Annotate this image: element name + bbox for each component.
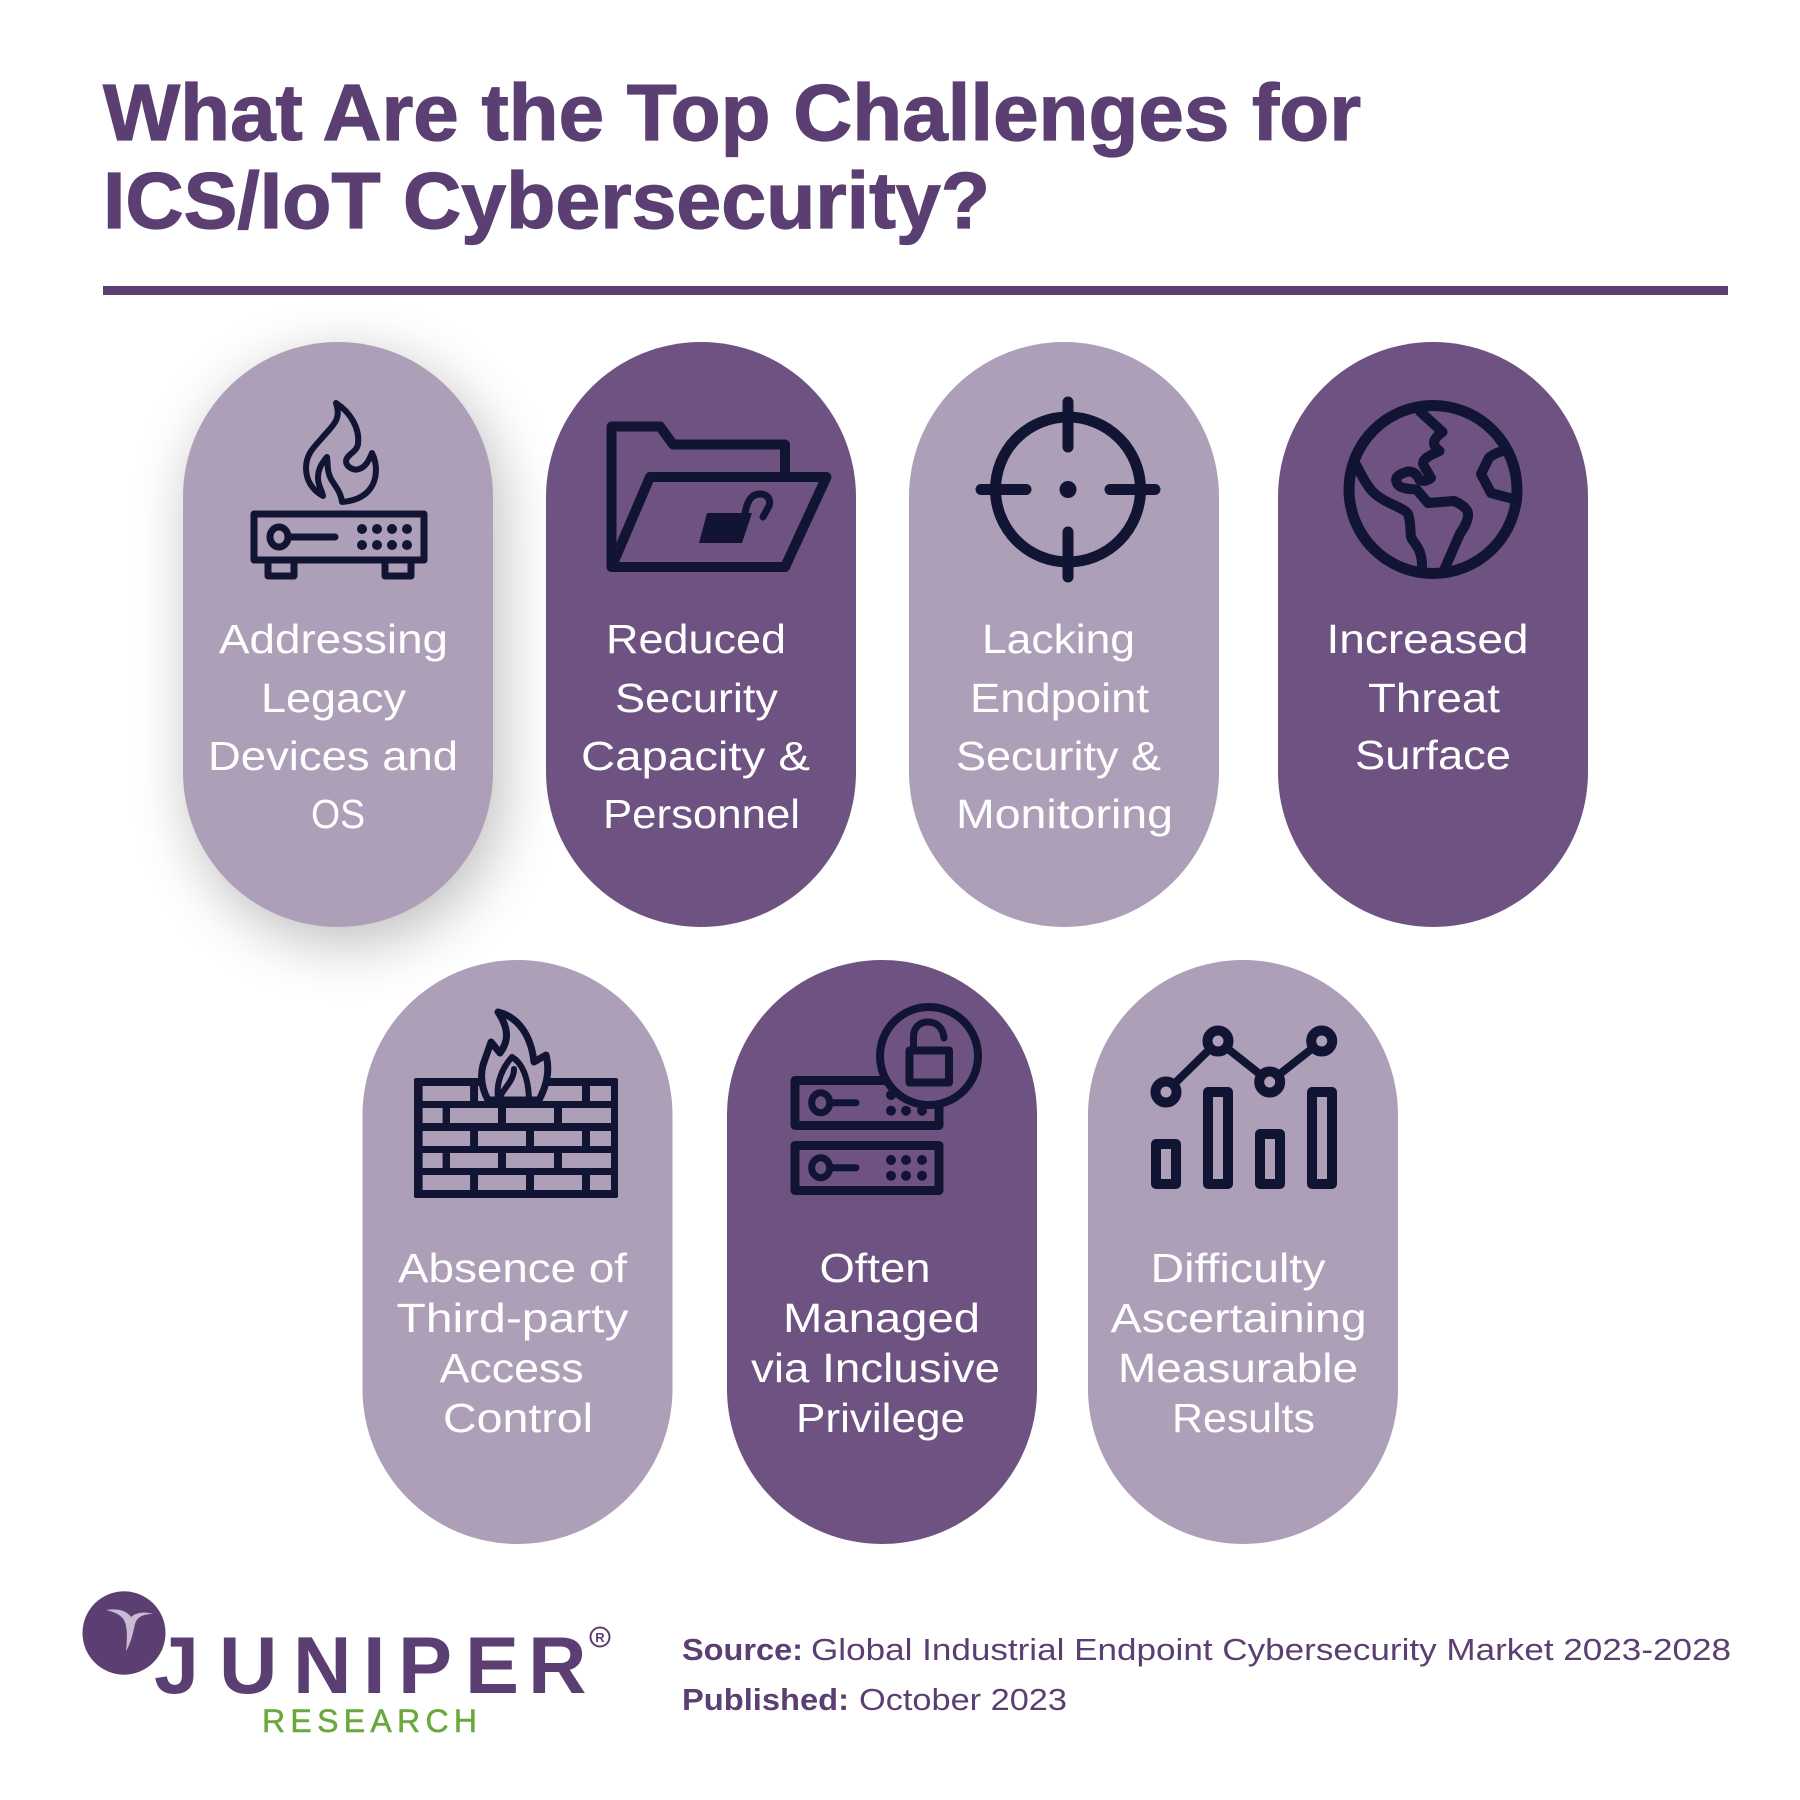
- label: Lacking: [982, 616, 1135, 662]
- source note: Global Industrial Endpoint Cybersecurity Market 2023-2028: [811, 1632, 1731, 1667]
- label: [396, 1245, 629, 1441]
- label: Absence of: [398, 1245, 628, 1291]
- panel: increased threat surface: [1278, 342, 1588, 927]
- label: [1326, 616, 1528, 778]
- label: Surface: [1355, 732, 1511, 778]
- icon: router on fire: [254, 403, 424, 576]
- icon: servers with open lock: [795, 1007, 978, 1190]
- icon: crosshair: [981, 402, 1155, 577]
- label: Results: [1172, 1395, 1315, 1441]
- icon: open folder with lock: [612, 426, 826, 567]
- logo: Juniper Research: RESEARCH: [262, 1703, 477, 1739]
- panel: absence of third-party access control: [362, 960, 672, 1544]
- label: Security &: [956, 733, 1161, 779]
- label: [956, 616, 1173, 837]
- label: Managed: [783, 1295, 980, 1341]
- label: Capacity &: [581, 733, 810, 779]
- label: Third-party: [396, 1295, 629, 1341]
- logo: Juniper Research: [82, 1591, 610, 1739]
- icon: firewall: [414, 1012, 618, 1198]
- title underline rule: [103, 286, 1728, 295]
- label: OS: [311, 791, 365, 837]
- source note: October 2023: [859, 1682, 1067, 1717]
- source note: Source:: [682, 1632, 803, 1667]
- label: [208, 616, 458, 837]
- label: Control: [443, 1395, 593, 1441]
- label: Increased: [1326, 616, 1528, 662]
- label: Security: [615, 675, 779, 721]
- label: Threat: [1368, 675, 1501, 721]
- label: Privilege: [796, 1395, 965, 1441]
- label: [581, 616, 810, 837]
- logo: Juniper Research: JUNIPER: [154, 1621, 586, 1711]
- label: Often: [820, 1245, 930, 1291]
- label: Legacy: [261, 675, 407, 721]
- label: Personnel: [603, 791, 800, 837]
- source note: [682, 1632, 1731, 1717]
- label: Access: [440, 1345, 584, 1391]
- label: Addressing: [219, 616, 448, 662]
- label: Devices and: [208, 733, 458, 779]
- label: via Inclusive: [751, 1345, 1000, 1391]
- panel: lacking endpoint security: [909, 342, 1219, 927]
- icon: globe: [1349, 406, 1517, 574]
- label: Difficulty: [1150, 1245, 1326, 1291]
- label: [1111, 1245, 1367, 1441]
- title: ICS/IoT Cybersecurity?: [103, 156, 990, 245]
- title: What Are the Top Challenges for: [103, 68, 1361, 157]
- panel: difficulty ascertaining measurable results: [1088, 960, 1398, 1544]
- panel: reduced security capacity: [546, 342, 856, 927]
- source note: Published:: [682, 1682, 849, 1717]
- logo: Juniper Research: R: [595, 1630, 605, 1645]
- panel: often managed via inclusive privilege: [727, 960, 1037, 1544]
- label: [751, 1245, 1000, 1441]
- label: Endpoint: [970, 675, 1150, 721]
- icon: line and bar chart: [1156, 1030, 1332, 1184]
- title: [103, 68, 1361, 245]
- panel: addressing legacy devices: [183, 342, 501, 943]
- label: Ascertaining: [1111, 1295, 1367, 1341]
- label: Reduced: [606, 616, 786, 662]
- label: Monitoring: [956, 791, 1173, 837]
- label: Measurable: [1118, 1345, 1358, 1391]
